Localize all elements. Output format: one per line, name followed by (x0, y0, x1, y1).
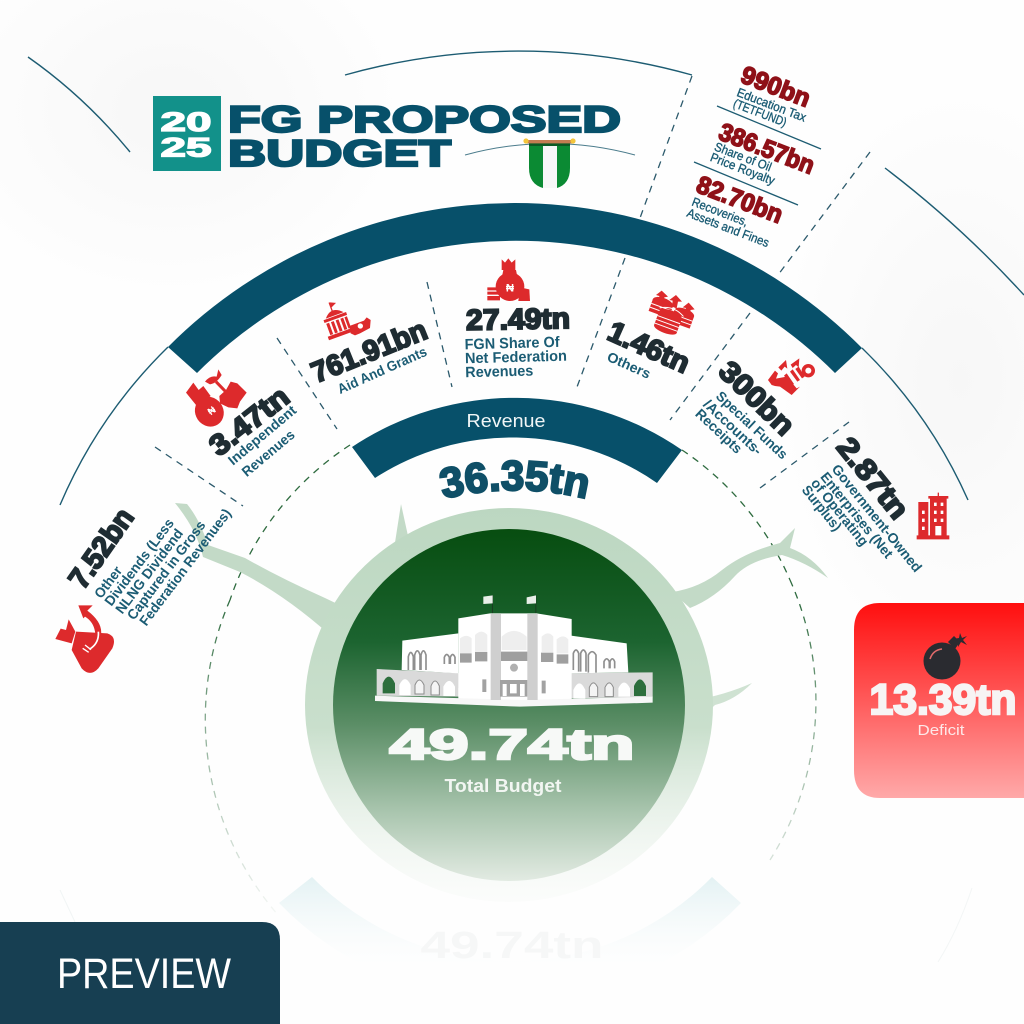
icon: government building (317, 298, 371, 340)
revenue band: Revenue (466, 411, 546, 431)
item: government-owned enterprises (799, 432, 949, 575)
item: FGN share: 27.49tn (466, 303, 570, 337)
title text: BUDGET (228, 133, 452, 174)
national assembly building (375, 595, 653, 707)
item: government-owned enterprises: Government-Owned (829, 461, 925, 575)
oil royalty: 386.57bn (715, 118, 818, 180)
deficit value: 13.39tn (870, 676, 1016, 724)
item: aid and grants: 761.91bn (307, 314, 432, 390)
total value: 49.74tn (390, 721, 634, 769)
item: others (603, 291, 696, 382)
title text: FG PROPOSED (228, 99, 621, 140)
item: government-owned enterprises: Enterprises (Net (817, 469, 897, 561)
total label: Total Budget (444, 776, 562, 796)
total budget circle (333, 529, 685, 881)
education tax: (TETFUND) (731, 96, 789, 130)
other revenues top right (685, 61, 821, 250)
deficit label: Deficit (918, 722, 965, 739)
item: FGN share: FGN Share Of (464, 334, 561, 353)
item: FGN share (464, 258, 570, 381)
preview tag (0, 922, 280, 1024)
faded reflection at the bottom (60, 877, 972, 1001)
item: FGN share: Revenues (465, 363, 534, 381)
oil royalty: Price Royalty (708, 150, 777, 188)
item: independent revenues: Independent (225, 402, 300, 468)
item: other dividends: Captured in Gross (124, 517, 209, 623)
item: other dividends: Other (91, 562, 126, 601)
item: special funds: 300bn (712, 355, 801, 442)
recoveries: Recoveries, (690, 195, 750, 229)
item: independent revenues: Revenues (238, 426, 298, 480)
item: government-owned enterprises: of Operating (808, 475, 872, 549)
big revenue band (168, 203, 862, 373)
item: others: 1.46tn (603, 316, 694, 380)
item: special funds: Receipts (692, 405, 746, 457)
item: other dividends: Dividends (Less (101, 515, 177, 609)
item: independent revenues (186, 369, 300, 480)
item: FGN share: Net Federation (465, 348, 567, 367)
oil royalty: Share of Oil (712, 140, 774, 174)
item: other dividends: 7.52bn (63, 503, 141, 595)
item: other dividends: Federation Revenues) (136, 505, 234, 629)
outer thin arcs (28, 51, 1024, 505)
icon: bag and sprout: ₦ (206, 404, 219, 418)
item: special funds (692, 355, 815, 462)
item: independent revenues: 3.47tn (204, 381, 296, 463)
icon: hand with coins (768, 358, 815, 395)
item: other dividends: NLNG Dividend (112, 525, 186, 617)
recoveries: 82.70bn (693, 171, 787, 229)
icon: bomb (924, 633, 967, 680)
item: government-owned enterprises: 2.87tn (830, 432, 915, 526)
panel: deficit (854, 603, 1024, 798)
revenue band (352, 398, 682, 483)
title block (153, 96, 635, 188)
icon: office building (917, 493, 949, 539)
icon: large money bag: ₦ (506, 282, 515, 294)
education tax: 990bn (737, 61, 814, 113)
year badge: 25 (160, 132, 212, 162)
education tax: Education Tax (735, 85, 809, 125)
item: special funds: Special Funds (713, 388, 791, 462)
item: special funds: /Accounts- (700, 396, 766, 458)
tree branches and pale ring (175, 503, 828, 902)
dashed inner circle (205, 445, 816, 915)
icon: coins and arrows (643, 291, 696, 341)
item: other dividends (55, 503, 234, 673)
item: aid and grants: Aid And Grants (335, 343, 429, 397)
item: others: Others (605, 348, 653, 382)
faded reflection at the bottom: 49.74tn (420, 925, 604, 967)
icon: money bag with arrow (55, 605, 114, 673)
dashed radial separators (155, 76, 870, 506)
revenue total: 36.35tn (439, 460, 588, 500)
flag pennant (465, 138, 635, 188)
recoveries: Assets and Fines (685, 206, 771, 250)
preview tag: PREVIEW (57, 950, 231, 998)
year badge: 20 (160, 107, 212, 137)
year badge (153, 96, 221, 171)
title text (228, 99, 621, 174)
item: government-owned enterprises: Surplus) (799, 482, 845, 534)
recoveries (685, 171, 787, 250)
